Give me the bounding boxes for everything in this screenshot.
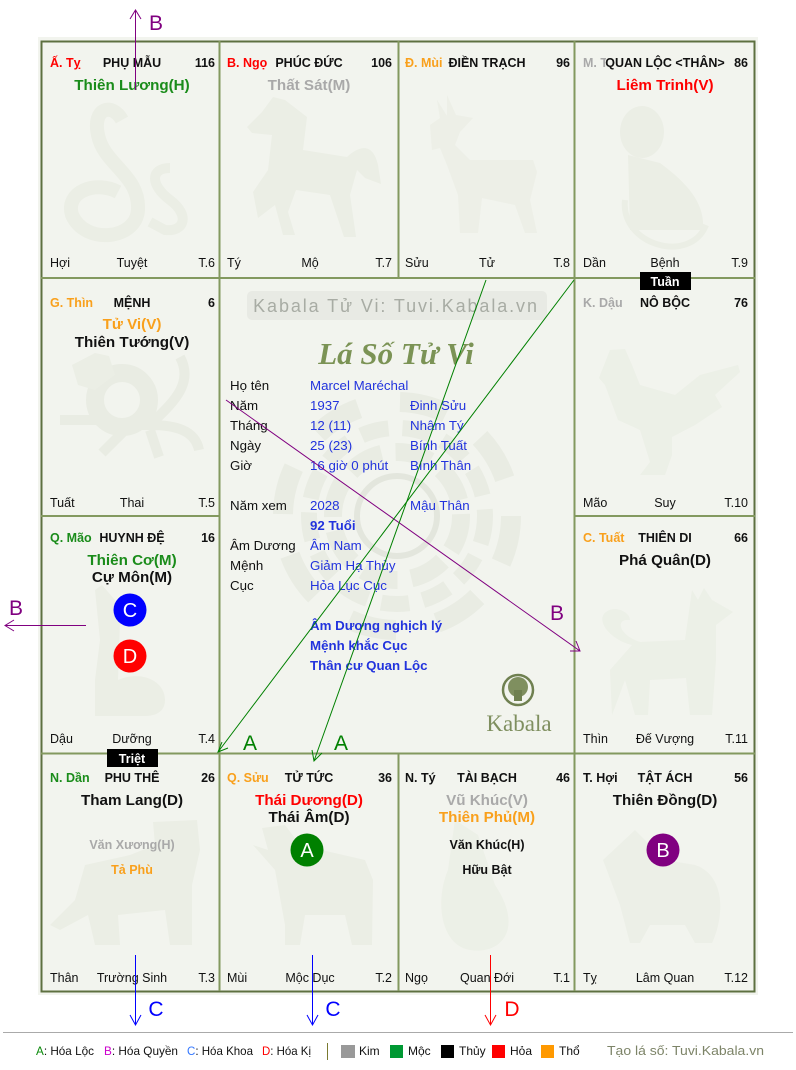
banner: Kabala Tử Vi: Kabala Tử Vi: Tuvi.Kabala.vn bbox=[253, 296, 539, 316]
arrow A to Sửu bbox=[312, 280, 486, 761]
palace: Dậu, Nô Bộc: Mão bbox=[583, 496, 607, 510]
palace: Tuất, Thiên Di bbox=[583, 530, 748, 746]
birth details: Bính Thân bbox=[410, 458, 471, 473]
board grid bbox=[41, 41, 755, 992]
marker C bbox=[114, 594, 146, 626]
arrow D: D bbox=[504, 998, 520, 1021]
palace: Sửu, Tử Tức: 36 bbox=[378, 771, 392, 785]
palace: Tý, Tài Bạch: Văn Khúc(H) bbox=[450, 838, 524, 852]
logo: Kabala: Kabala bbox=[486, 711, 552, 736]
legend: transformations: D: Hóa Kị bbox=[262, 1044, 311, 1058]
palace: Dần, Phu Thê: 26 bbox=[201, 771, 215, 785]
marker D: D bbox=[123, 646, 137, 668]
badge: Triệt bbox=[107, 749, 158, 767]
palace: Sửu, Tử Tức: Mùi bbox=[227, 971, 247, 985]
legend divider bbox=[327, 1043, 328, 1060]
palace: Mão, Huynh Đệ: Q. Mão bbox=[50, 531, 92, 545]
arrow A to Dần bbox=[218, 280, 574, 755]
badge: Triệt: Triệt bbox=[119, 752, 146, 766]
marker B bbox=[646, 834, 680, 866]
icon: bagua watermark bbox=[283, 402, 511, 630]
birth details: Nhâm Tý bbox=[410, 418, 464, 433]
palace: Thân, Quan Lộc: QUAN LỘC <THÂN> bbox=[605, 55, 725, 70]
palace: Mùi, Điền Trạch: ĐIỀN TRẠCH bbox=[448, 55, 526, 70]
palace: Mùi, Điền Trạch: Sửu bbox=[405, 256, 429, 270]
palace: Dậu, Nô Bộc bbox=[583, 295, 748, 510]
palace: Dần, Phu Thê: N. Dần bbox=[50, 771, 90, 785]
palace: Thân, Quan Lộc: M. Thân bbox=[583, 56, 630, 70]
palace: Hợi, Tật Ách: T.12 bbox=[724, 971, 748, 985]
birth details: Giảm Hạ Thủy bbox=[310, 558, 396, 573]
birth details: 92 Tuổi bbox=[310, 518, 356, 533]
birth details: Mậu Thân bbox=[410, 498, 470, 513]
palace: Hợi, Tật Ách: T. Hợi bbox=[583, 771, 618, 785]
legend: elements: Hỏa bbox=[510, 1044, 532, 1058]
palace: Mão, Huynh Đệ: Cự Môn(M) bbox=[92, 569, 172, 586]
birth details: 25 (23) bbox=[310, 438, 352, 453]
palace: Tý, Tài Bạch bbox=[405, 770, 570, 985]
palace: Dậu, Nô Bộc: K. Dậu bbox=[583, 296, 623, 310]
birth details: Marcel Maréchal bbox=[310, 378, 408, 393]
arrow B diagonal bbox=[226, 400, 580, 651]
palace: Ngọ, Phúc Đức: Tý bbox=[227, 256, 242, 270]
legend: transformations: C: Hóa Khoa bbox=[187, 1044, 253, 1058]
palace: Hợi, Tật Ách: Tỵ bbox=[583, 971, 598, 985]
palace: Tý, Tài Bạch: Thiên Phủ(M) bbox=[439, 809, 535, 826]
palace: Tuất, Thiên Di: THIÊN DI bbox=[638, 530, 692, 545]
palace: Mão, Huynh Đệ: T.4 bbox=[198, 732, 215, 746]
palace: Mão, Huynh Đệ: Dưỡng bbox=[112, 732, 152, 746]
palace: Tỵ, Phụ Mẫu: Hợi bbox=[50, 256, 70, 270]
arrow B up: B bbox=[149, 12, 163, 35]
palace: Tỵ, Phụ Mẫu: T.6 bbox=[198, 256, 215, 270]
birth details: Ngày bbox=[230, 438, 261, 453]
palace: Thìn, Mệnh: Thai bbox=[120, 496, 144, 510]
palace: Mùi, Điền Trạch: Tử bbox=[479, 256, 495, 270]
footer link text: Tạo lá số: Tuvi.Kabala.vn bbox=[607, 1043, 764, 1058]
palace: Mão, Huynh Đệ: Dậu bbox=[50, 732, 73, 746]
palace: Thìn, Mệnh: T.5 bbox=[198, 496, 215, 510]
birth details: Hỏa Lục Cục bbox=[310, 578, 387, 593]
birth details: 1937 bbox=[310, 398, 340, 413]
birth details: Đinh Sửu bbox=[410, 398, 466, 413]
birth details: 2028 bbox=[310, 498, 340, 513]
icon: dragon watermark bbox=[60, 353, 199, 457]
palace: Thìn, Mệnh: Tử Vi(V) bbox=[103, 316, 161, 333]
palace: Sửu, Tử Tức: T.2 bbox=[375, 971, 392, 985]
palace: Tuất, Thiên Di: Phá Quân(D) bbox=[619, 552, 711, 569]
palace: Thìn, Mệnh: 6 bbox=[208, 296, 215, 310]
arrow B diagonal: B bbox=[550, 602, 564, 625]
birth details: 12 (11) bbox=[310, 418, 351, 433]
icon: dog watermark bbox=[602, 588, 733, 715]
palace: Thìn, Mệnh: MỆNH bbox=[114, 295, 150, 310]
badge: Tuần bbox=[640, 272, 691, 290]
palace: Mão, Huynh Đệ: 16 bbox=[201, 531, 215, 545]
palace: Dần, Phu Thê: Tham Lang(D) bbox=[81, 792, 183, 809]
palace: Hợi, Tật Ách: Lâm Quan bbox=[636, 971, 694, 985]
birth details: Cục bbox=[230, 578, 254, 593]
legend: elements bbox=[341, 1044, 580, 1058]
palace: Tý, Tài Bạch: Hữu Bật bbox=[462, 863, 512, 877]
palace: Thân, Quan Lộc: Dần bbox=[583, 256, 606, 270]
palace: Tuất, Thiên Di: T.11 bbox=[725, 732, 748, 746]
palace: Thìn, Mệnh: Tuất bbox=[50, 496, 75, 510]
arrow D bbox=[485, 955, 520, 1025]
icon: rat watermark bbox=[441, 820, 509, 951]
palace: Thìn, Mệnh: Thiên Tướng(V) bbox=[75, 334, 189, 351]
marker D bbox=[114, 640, 146, 672]
palace: Sửu, Tử Tức: Thái Âm(D) bbox=[268, 808, 350, 826]
palace: Hợi, Tật Ách: TẬT ÁCH bbox=[638, 770, 692, 785]
palace: Tý, Tài Bạch: Ngọ bbox=[405, 971, 428, 985]
logo: Kabala bbox=[486, 675, 552, 736]
icon: rabbit watermark bbox=[95, 585, 165, 716]
palace: Ngọ, Phúc Đức: T.7 bbox=[375, 256, 392, 270]
palace: Tỵ, Phụ Mẫu bbox=[50, 55, 215, 270]
palace: Dần, Phu Thê bbox=[50, 770, 215, 985]
palace: Hợi, Tật Ách bbox=[583, 770, 748, 985]
palace: Ngọ, Phúc Đức: Thất Sát(M) bbox=[268, 77, 350, 94]
birth details: Họ tên bbox=[230, 378, 269, 393]
palace: Sửu, Tử Tức bbox=[227, 770, 392, 985]
heading: Lá Số Tử Vi: Lá Số Tử Vi bbox=[317, 336, 474, 371]
marker C: C bbox=[123, 600, 137, 622]
palace: Tuất, Thiên Di: C. Tuất bbox=[583, 531, 625, 545]
arrow B left: B bbox=[9, 597, 23, 620]
palace: Dần, Phu Thê: PHU THÊ bbox=[105, 770, 159, 785]
badge: Tuần: Tuần bbox=[651, 275, 679, 289]
icon: pig watermark bbox=[603, 830, 720, 943]
palace: Ngọ, Phúc Đức: 106 bbox=[371, 56, 392, 70]
palace: Tuất, Thiên Di: Đế Vượng bbox=[636, 732, 694, 746]
arrow A to Dần: A bbox=[243, 732, 257, 755]
palace: Hợi, Tật Ách: Thiên Đồng(D) bbox=[613, 792, 717, 809]
palace: Sửu, Tử Tức: TỬ TỨC bbox=[285, 770, 333, 785]
palace: Dậu, Nô Bộc: Suy bbox=[654, 496, 677, 510]
palace: Hợi, Tật Ách: 56 bbox=[734, 771, 748, 785]
palace: Tý, Tài Bạch: 46 bbox=[556, 771, 570, 785]
icon: tiger watermark bbox=[50, 820, 200, 945]
palace: Dần, Phu Thê: Văn Xương(H) bbox=[89, 838, 175, 852]
birth details: Giờ bbox=[230, 458, 252, 473]
palace: Dậu, Nô Bộc: T.10 bbox=[724, 496, 748, 510]
birth details: Âm Dương nghịch lý bbox=[310, 618, 443, 633]
birth details: Mệnh khắc Cục bbox=[310, 638, 408, 653]
legend: transformations: B: Hóa Quyền bbox=[104, 1044, 178, 1058]
icon: buffalo watermark bbox=[253, 825, 373, 945]
icon: snake watermark bbox=[71, 110, 183, 235]
palace: Sửu, Tử Tức: Thái Dương(D) bbox=[255, 792, 363, 809]
palace: Mão, Huynh Đệ: Thiên Cơ(M) bbox=[87, 552, 177, 569]
arrow A to Sửu: A bbox=[334, 732, 348, 755]
palace: Tuất, Thiên Di: 66 bbox=[734, 531, 748, 545]
footer rule bbox=[3, 1032, 793, 1033]
palace: Thân, Quan Lộc: Bệnh bbox=[650, 256, 680, 270]
arrow C left: C bbox=[148, 998, 164, 1021]
palace: Mão, Huynh Đệ bbox=[50, 530, 215, 746]
palace: Mùi, Điền Trạch: 96 bbox=[556, 56, 570, 70]
palace: Tý, Tài Bạch: Quan Đới bbox=[460, 971, 514, 985]
icon: horse watermark bbox=[247, 97, 381, 237]
palace: Thìn, Mệnh bbox=[50, 295, 215, 510]
palace: Tý, Tài Bạch: Vũ Khúc(V) bbox=[446, 792, 528, 809]
legend: elements: Kim bbox=[359, 1044, 380, 1058]
palace: Dậu, Nô Bộc: 76 bbox=[734, 296, 748, 310]
palace: Tỵ, Phụ Mẫu: Thiên Lương(H) bbox=[74, 77, 190, 94]
legend: elements: Thổ bbox=[559, 1044, 580, 1058]
palace: Thân, Quan Lộc: T.9 bbox=[731, 256, 748, 270]
icon: monkey watermark bbox=[620, 106, 706, 247]
palace: Ngọ, Phúc Đức bbox=[227, 55, 392, 270]
palace: Thân, Quan Lộc: 86 bbox=[734, 56, 748, 70]
birth details: Bính Tuất bbox=[410, 438, 467, 453]
palace: Sửu, Tử Tức: Q. Sửu bbox=[227, 771, 269, 785]
banner: Kabala Tử Vi bbox=[247, 291, 547, 320]
legend: transformations bbox=[36, 1044, 311, 1058]
palace: Ngọ, Phúc Đức: Mộ bbox=[301, 256, 319, 270]
marker B: B bbox=[656, 840, 670, 862]
palace: Tỵ, Phụ Mẫu: PHỤ MẪU bbox=[103, 55, 161, 70]
birth details: 16 giờ 0 phút bbox=[310, 458, 389, 473]
marker A bbox=[290, 834, 324, 866]
arrow B up bbox=[130, 10, 163, 90]
arrow C left bbox=[130, 955, 164, 1025]
palace: Ngọ, Phúc Đức: B. Ngọ bbox=[227, 56, 268, 70]
palace: Dậu, Nô Bộc: NÔ BỘC bbox=[640, 295, 690, 310]
palace: Tý, Tài Bạch: TÀI BẠCH bbox=[457, 770, 517, 785]
palace: Tỵ, Phụ Mẫu: Ấ. Tỵ bbox=[50, 55, 81, 70]
palace: Dần, Phu Thê: T.3 bbox=[198, 971, 215, 985]
palace: Ngọ, Phúc Đức: PHÚC ĐỨC bbox=[275, 55, 343, 70]
arrow B left bbox=[5, 597, 86, 631]
icon: goat watermark bbox=[430, 95, 537, 233]
birth details: Thân cư Quan Lộc bbox=[310, 658, 428, 673]
birth details: Năm xem bbox=[230, 498, 287, 513]
legend: elements: Thủy bbox=[459, 1044, 486, 1058]
palace: Tỵ, Phụ Mẫu: Tuyệt bbox=[117, 256, 148, 270]
palace: Tỵ, Phụ Mẫu: 116 bbox=[195, 56, 215, 70]
palace: Thìn, Mệnh: G. Thìn bbox=[50, 296, 93, 310]
arrow C right: C bbox=[325, 998, 341, 1021]
birth details: Mệnh bbox=[230, 558, 263, 573]
palace: Dần, Phu Thê: Thân bbox=[50, 971, 79, 985]
icon: rooster watermark bbox=[599, 349, 740, 475]
palace: Mùi, Điền Trạch: Đ. Mùi bbox=[405, 56, 442, 70]
birth details: Âm Nam bbox=[310, 538, 362, 553]
legend: transformations: A: Hóa Lộc bbox=[36, 1044, 94, 1058]
birth details: Tháng bbox=[230, 418, 268, 433]
palace: Tuất, Thiên Di: Thìn bbox=[583, 732, 608, 746]
palace: Tý, Tài Bạch: N. Tý bbox=[405, 771, 436, 785]
palace: Sửu, Tử Tức: Mộc Dục bbox=[285, 971, 335, 985]
palace: Dần, Phu Thê: Trường Sinh bbox=[97, 971, 167, 985]
palace: Mão, Huynh Đệ: HUYNH ĐỆ bbox=[99, 530, 165, 545]
palace: Mùi, Điền Trạch: T.8 bbox=[553, 256, 570, 270]
palace: Dần, Phu Thê: Tả Phù bbox=[111, 863, 153, 877]
palace: Thân, Quan Lộc bbox=[583, 54, 748, 270]
birth details: Năm bbox=[230, 398, 258, 413]
legend: elements: Mộc bbox=[408, 1044, 431, 1058]
arrow C right bbox=[307, 955, 341, 1025]
marker A: A bbox=[300, 840, 314, 862]
palace: Thân, Quan Lộc: Liêm Trinh(V) bbox=[616, 77, 714, 94]
birth details: Âm Dương bbox=[230, 538, 296, 553]
palace: Mùi, Điền Trạch bbox=[405, 55, 570, 270]
palace: Tý, Tài Bạch: T.1 bbox=[553, 971, 570, 985]
birth details bbox=[230, 378, 471, 673]
